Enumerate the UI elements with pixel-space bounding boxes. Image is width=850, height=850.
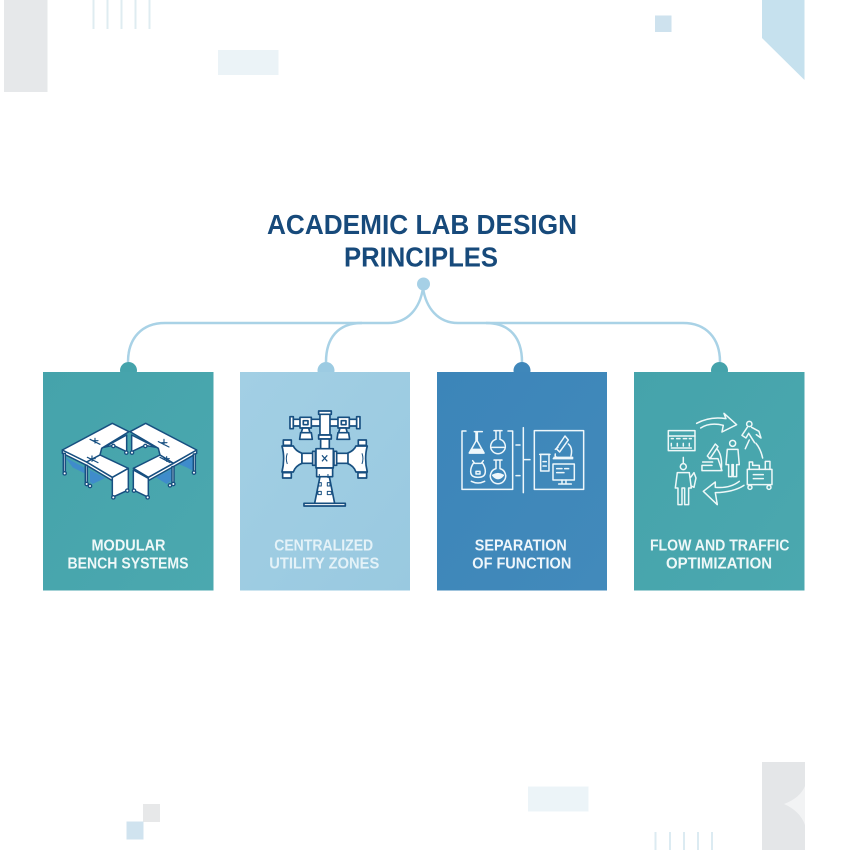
label (269, 538, 379, 572)
icon: labware and equipment (462, 428, 584, 493)
icon: utility tower (282, 411, 367, 506)
label: OPTIMIZATION (666, 556, 772, 572)
label (472, 538, 571, 572)
label: BENCH SYSTEMS (68, 556, 188, 572)
label (650, 538, 789, 572)
connector tree (128, 278, 720, 362)
label: FLOW AND TRAFFIC (650, 538, 789, 554)
title (267, 209, 577, 272)
panel: centralized utility zones (240, 362, 410, 590)
icon: people and flow arrows (668, 413, 772, 505)
title: PRINCIPLES (344, 242, 498, 272)
label: CENTRALIZED (274, 538, 373, 554)
label: MODULAR (92, 538, 166, 554)
panel: separation of function (437, 362, 607, 590)
label: SEPARATION (475, 538, 567, 554)
icon: modular benches (62, 423, 197, 499)
label (68, 538, 188, 572)
panel: modular bench systems (43, 362, 214, 590)
root node (417, 278, 430, 290)
label: OF FUNCTION (472, 556, 571, 572)
panel: flow and traffic optimization (634, 362, 804, 590)
label: UTILITY ZONES (269, 556, 379, 572)
title: ACADEMIC LAB DESIGN (267, 209, 577, 240)
